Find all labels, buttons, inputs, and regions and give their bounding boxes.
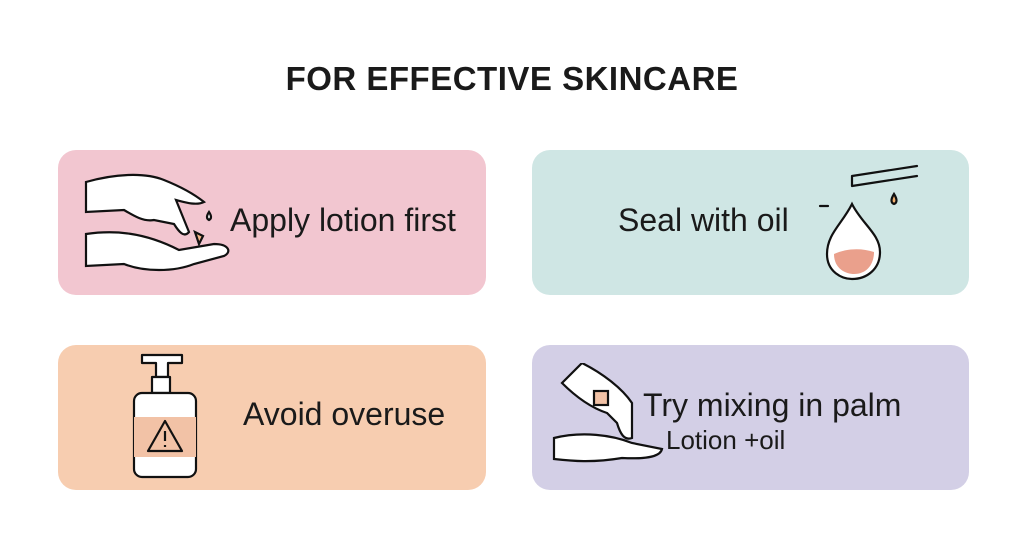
text: Seal with oil [618, 202, 789, 238]
panel: apply lotion [58, 150, 486, 295]
text: Apply lotion first [230, 202, 456, 238]
panel: avoid overuse [58, 345, 486, 490]
text: Avoid overuse [243, 396, 445, 432]
icon: hands [84, 174, 230, 272]
panel: try mixing [532, 345, 969, 490]
title: FOR EFFECTIVE SKINCARE [286, 60, 738, 97]
text: Try mixing in palm [643, 387, 901, 423]
panel: seal with oil [532, 150, 969, 295]
icon: hands mixing [552, 363, 664, 462]
subtext: Lotion +oil [666, 425, 785, 455]
icon: oil drop flask [818, 164, 918, 280]
icon: pump bottle warning [132, 354, 198, 478]
